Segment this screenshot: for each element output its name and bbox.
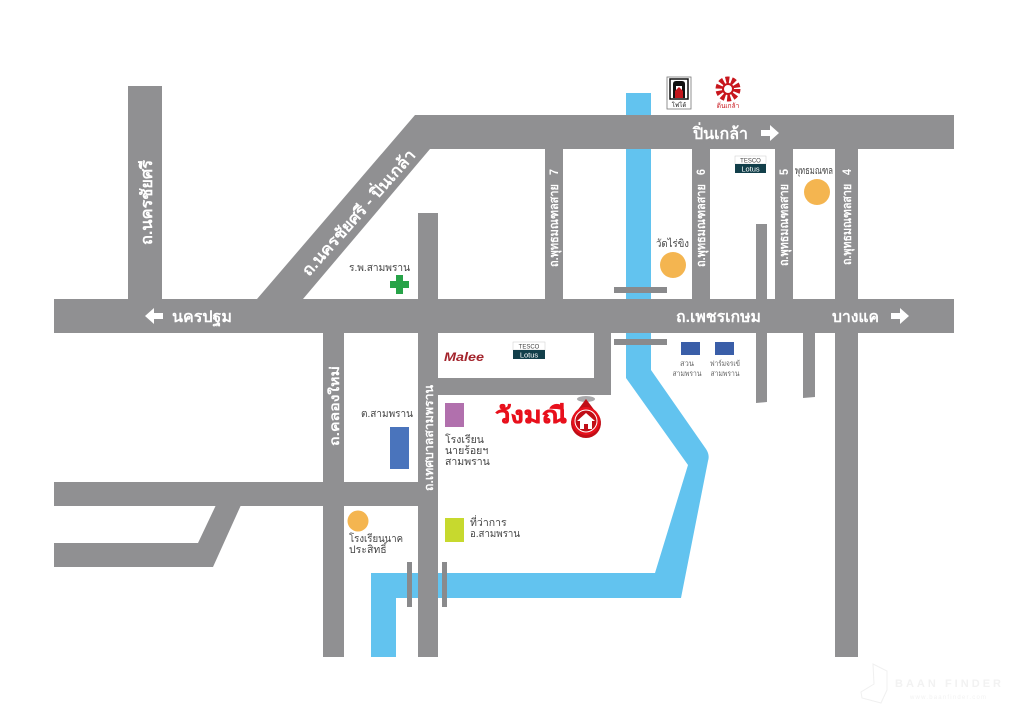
landmark: ร.พ.สามพราน: ร.พ.สามพราน — [349, 262, 410, 274]
landmark: ต.สามพราน: ต.สามพราน — [361, 408, 413, 420]
road label: สาย 5: ถ.พุทธมณฑลสาย 5 — [777, 169, 792, 266]
road label: ถ.เทศบาลสามพราน: ถ.เทศบาลสามพราน — [422, 384, 436, 491]
watermark: Baan Finder: www.baanfinder.com — [909, 695, 986, 701]
landmark: สวนสามพราน — [672, 342, 702, 378]
landmark: ฟาร์มจรเข้สามพราน: สามพราน — [710, 369, 740, 378]
landmark: พุทธมณฑล: พุทธมณฑล — [795, 165, 833, 177]
arrow: right to บางแค — [891, 308, 909, 324]
landmark: วัดไร่ขิง: วัดไร่ขิง — [656, 237, 689, 250]
river — [371, 93, 709, 657]
landmark: โรงเรียนนาคประสิทธิ์: ประสิทธิ์ — [349, 541, 388, 556]
landmark: ฟาร์มจรเข้สามพราน — [710, 342, 740, 378]
logo: Tesco Lotus upper: TESCO — [740, 158, 761, 164]
logo: Tesco Lotus lower: Lotus — [520, 350, 538, 360]
logo: Tesco Lotus lower — [513, 342, 545, 360]
logo: red sun — [717, 80, 740, 110]
arrow: left to นครปฐม — [145, 308, 163, 324]
road label: ถ.เพชรเกษม: ถ.เพชรเกษม — [676, 309, 761, 326]
landmark: ที่ว่าการ อ.สามพราน: อ.สามพราน — [470, 528, 520, 540]
road label: ถ.นครชัยศรี - ปิ่นเกล้า: ถ.นครชัยศรี - ปิ่นเกล้า — [296, 144, 419, 280]
icon: location pin — [571, 396, 601, 438]
watermark: Baan Finder — [861, 664, 1002, 703]
logo: Malee: Malee — [444, 350, 484, 364]
logo: shop: โฟโต้ — [672, 101, 686, 109]
logo: red sun: ดิ่นเกล้า — [717, 101, 740, 110]
road label: นครปฐม: นครปฐม — [172, 309, 232, 327]
road label: ถ.คลองใหม่: ถ.คลองใหม่ — [326, 366, 342, 446]
road label: สาย 7: ถ.พุทธมณฑลสาย 7 — [547, 169, 562, 267]
logo: Tesco Lotus upper: Lotus — [741, 164, 760, 174]
road network — [54, 86, 954, 657]
landmark: โรงเรียนนายร้อยฯ สามพราน: โรงเรียน — [445, 433, 484, 446]
landmark: ที่ว่าการ อ.สามพราน: ที่ว่าการ — [470, 515, 507, 529]
landmark: สวนสามพราน: สวน — [680, 359, 694, 368]
road label: ถ.นครชัยศรี: ถ.นครชัยศรี — [137, 160, 156, 245]
landmark: ที่ว่าการ อ.สามพราน — [445, 515, 520, 542]
landmark: โรงเรียนนายร้อยฯ สามพราน — [445, 403, 490, 468]
landmark: พุทธมณฑล — [795, 165, 833, 205]
arrow: right to ปิ่นเกล้า — [761, 125, 779, 141]
logo: Tesco Lotus lower: TESCO — [519, 344, 540, 350]
landmark: ฟาร์มจรเข้สามพราน: ฟาร์มจรเข้ — [710, 359, 740, 368]
road label: ปิ่นเกล้า: ปิ่นเกล้า — [692, 122, 748, 143]
landmark: ต.สามพราน — [361, 408, 413, 469]
landmark: ร.พ.สามพราน — [349, 262, 410, 294]
landmark: โรงเรียนนายร้อยฯ สามพราน: สามพราน — [445, 456, 490, 468]
bridges — [407, 287, 667, 607]
landmark: โรงเรียนนาคประสิทธิ์: โรงเรียนนาค — [349, 532, 403, 545]
project name: วังมณี: วังมณี — [495, 402, 567, 428]
road label: สาย 4: ถ.พุทธมณฑลสาย 4 — [840, 169, 855, 265]
watermark: Baan Finder: BAAN FINDER — [895, 678, 1002, 690]
logo: Tesco Lotus upper — [735, 156, 766, 174]
logo: shop — [667, 77, 691, 109]
landmark: โรงเรียนนายร้อยฯ สามพราน: นายร้อยฯ — [445, 445, 488, 457]
road label: บางแค: บางแค — [832, 309, 879, 326]
landmark: โรงเรียนนาคประสิทธิ์ — [348, 510, 403, 556]
landmark: สวนสามพราน: สามพราน — [672, 369, 702, 378]
road label: สาย 6: ถ.พุทธมณฑลสาย 6 — [694, 169, 709, 267]
landmark: วัดไร่ขิง — [656, 237, 689, 278]
